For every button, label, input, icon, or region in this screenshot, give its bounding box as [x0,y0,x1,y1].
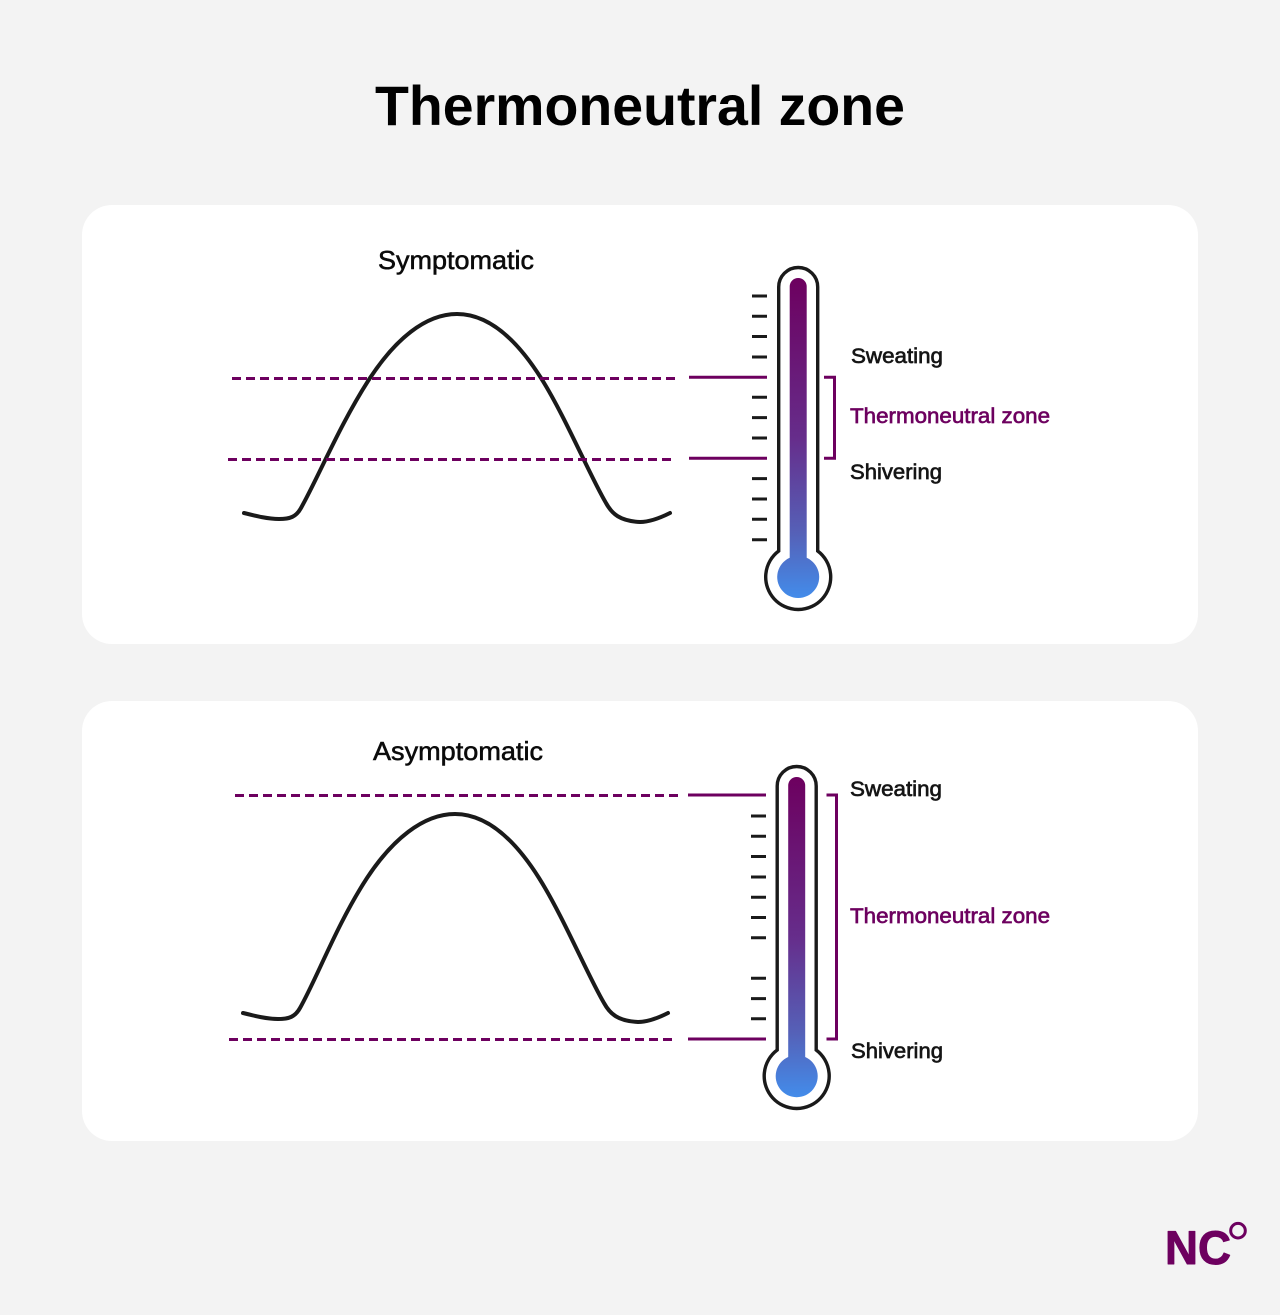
label: thermoneutral zone: Thermoneutral zone [850,405,1050,428]
label: thermoneutral zone: Thermoneutral zone [850,905,1050,928]
lower threshold dashed line [228,458,672,461]
heading: symptomatic: Symptomatic [378,245,534,275]
upper and lower threshold ticks [688,795,766,1039]
bracket [826,795,836,1039]
label: shivering: Shivering [851,1040,943,1063]
label: sweating: Sweating [851,345,943,368]
lower threshold dashed line [229,1038,673,1041]
icon: thermometer [766,268,831,610]
upper and lower threshold ticks [689,377,767,458]
icon: thermometer [764,766,829,1108]
scale ticks [752,296,767,540]
upper threshold dashed line [232,377,676,380]
label: sweating: Sweating [850,778,942,801]
heading: asymptomatic: Asymptomatic [373,736,543,766]
bracket [824,377,834,458]
logo: NC [1165,1221,1231,1274]
chart: temperature curve [243,814,668,1022]
upper threshold dashed line [235,794,679,797]
scale ticks [751,816,766,1019]
title: Thermoneutral zone [375,74,905,137]
chart: temperature curve [244,314,670,522]
panel: asymptomatic [82,701,1198,1141]
label: shivering: Shivering [850,461,942,484]
panel: symptomatic [82,205,1198,644]
